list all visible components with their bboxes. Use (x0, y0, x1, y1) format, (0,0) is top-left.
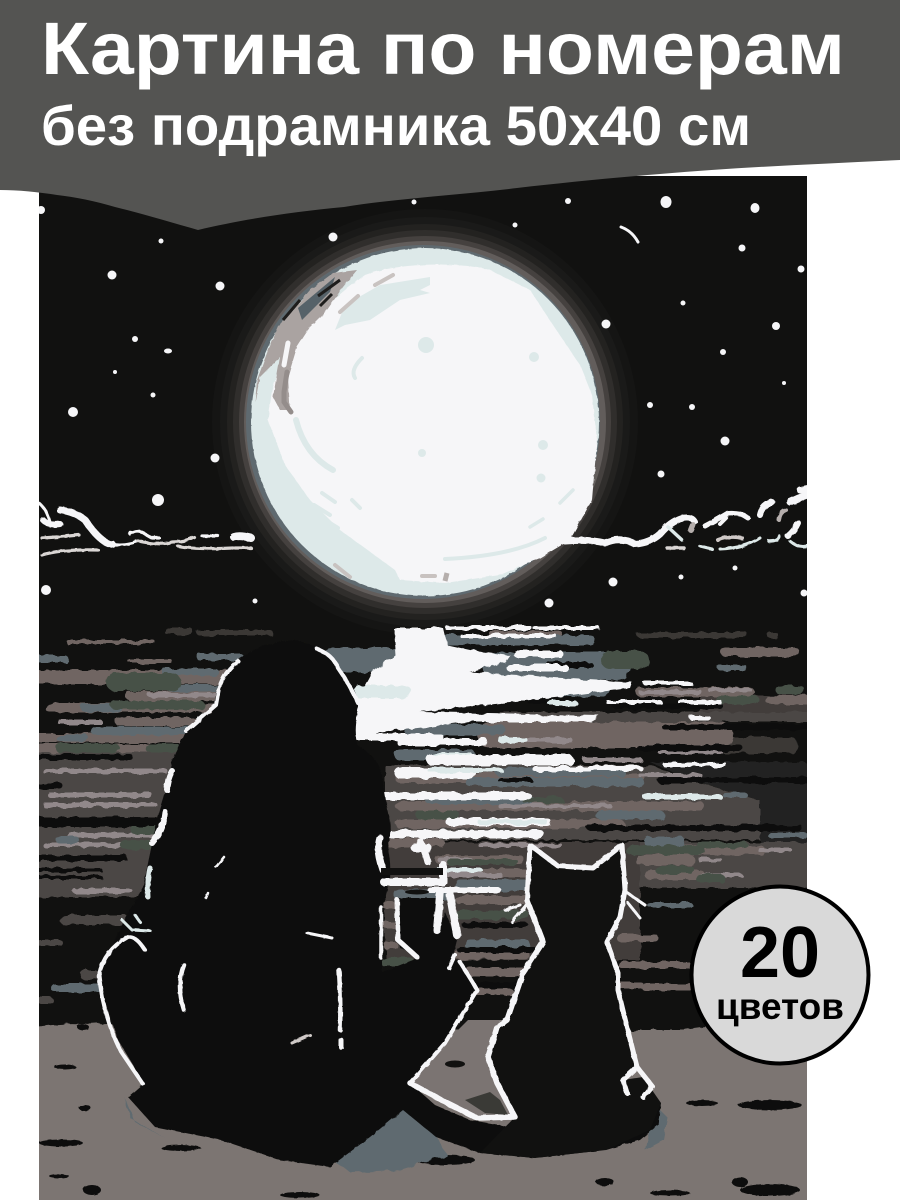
moon with halo (212, 209, 638, 635)
moon craters (418, 337, 548, 482)
pebble in gap (445, 1060, 465, 1068)
header ribbon (0, 0, 900, 230)
moon bright disc (268, 265, 597, 583)
dark pebbles on sand (39, 1024, 802, 1198)
girl silhouette (97, 640, 661, 1167)
blue-grey shadow patches (125, 1098, 668, 1172)
cup (381, 868, 443, 894)
light taupe streaks (45, 690, 790, 891)
cat silhouette (480, 843, 661, 1158)
badge caption: цветов (716, 986, 844, 1027)
girl hair highlights (186, 661, 238, 731)
dark shadow bars (39, 660, 807, 954)
faint top tones (167, 631, 790, 745)
tail shadow in gap (465, 1092, 508, 1115)
girl back outline (99, 937, 145, 1084)
shooting star (621, 227, 638, 242)
sea water (20, 628, 820, 1000)
girl arm outline (410, 955, 477, 1083)
cat whiskers (505, 892, 645, 922)
sand beach (15, 1022, 830, 1200)
badge: 20 colours (692, 886, 868, 1064)
night sky background (39, 176, 807, 1032)
white glints on water (357, 628, 725, 848)
green water strokes (60, 660, 800, 962)
distant waves, right (565, 488, 810, 549)
title: Картина по номерам (41, 7, 845, 90)
subtitle: без подрамника 50х40 см (41, 94, 751, 157)
cup and hand outline (384, 865, 443, 882)
rim light outlines (99, 649, 652, 1118)
slate water strokes (40, 640, 805, 988)
badge number: 20 (740, 913, 820, 993)
gap between knee and cat (458, 1020, 502, 1031)
taupe water strokes (40, 633, 807, 992)
pale glints (430, 770, 720, 870)
lower left patches (40, 920, 125, 1000)
moon reflection (355, 628, 632, 736)
pale water patches (360, 692, 575, 755)
painting: moonlit night sea (15, 176, 830, 1200)
cat outline (527, 845, 652, 1097)
distant waves, left (39, 503, 251, 555)
brown water base (20, 712, 820, 897)
stars (37, 196, 808, 608)
moon shading top-left (255, 270, 573, 581)
